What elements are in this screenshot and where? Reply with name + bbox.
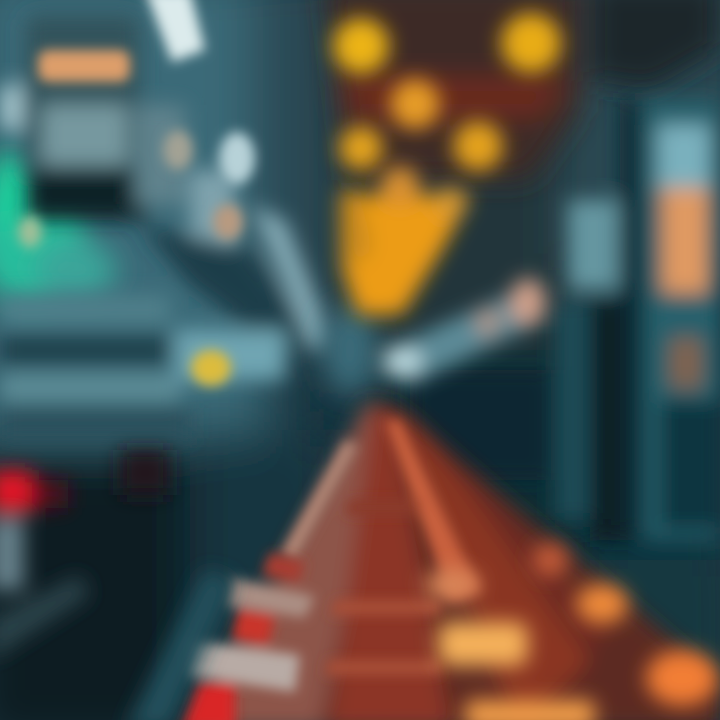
hanging lamps bbox=[333, 13, 561, 171]
road: red light trails bbox=[190, 400, 720, 720]
left: green glow bbox=[0, 152, 117, 305]
right: diagonal light beam bbox=[382, 278, 546, 385]
left: dark street with red light bbox=[0, 450, 235, 720]
road: light streaks bbox=[280, 420, 480, 675]
central yellow sign bbox=[340, 166, 472, 315]
centre haze bbox=[322, 305, 378, 395]
road: bright lamps bbox=[424, 543, 718, 720]
dark canopy at top centre bbox=[325, 0, 720, 180]
left: building tiers bbox=[0, 15, 335, 438]
right: columns bbox=[410, 100, 720, 540]
road: red and white barrier bbox=[180, 552, 315, 720]
left: lights bbox=[18, 0, 255, 386]
